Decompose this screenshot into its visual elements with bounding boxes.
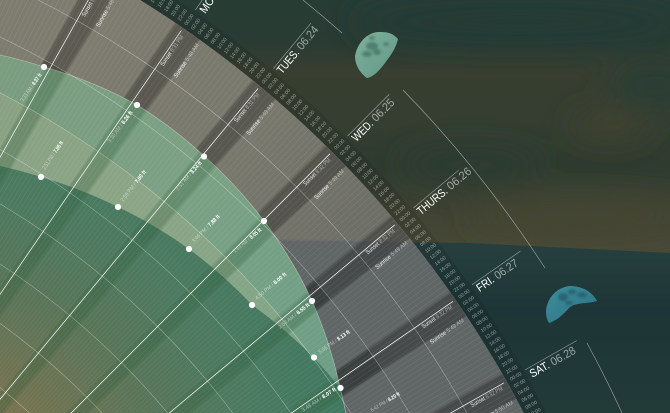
hours: Tuesday [258, 72, 343, 146]
hours: Thursday [396, 210, 470, 295]
hours: Wednesday [330, 138, 410, 218]
day divider lines and sunrise/sunset labels [0, 0, 516, 413]
translucent gray band: daylight ring [0, 0, 524, 413]
day line: Tuesday 06.24 [0, 88, 277, 413]
day line: Monday 06.23 [0, 30, 202, 413]
hours: Friday: 08:00 [475, 315, 489, 327]
hours: Wednesday: 00:00 [333, 138, 346, 151]
hours: Monday: 06:00 [203, 27, 216, 41]
hours: Friday: 20:00 [501, 357, 515, 369]
heading: WED 06.25: 06.25 [370, 97, 397, 124]
heading: TUES 06.24 [273, 23, 322, 77]
hours: Wednesday: 16:00 [378, 186, 391, 199]
hour labels around the rim [141, 0, 543, 413]
hours: Monday: 18:00 [242, 56, 255, 70]
outer arc connecting the moons [303, 0, 622, 413]
day line: Tuesday 06.24: Sunset 8:31 PM [234, 92, 261, 124]
tide label: 3:30 AM: 3:30 AM / 8.26 ft [107, 110, 135, 144]
tide label: 2:59 PM: 2:59 PM / 7.60 ft [120, 169, 148, 203]
day line: Sunday 06.22 [0, 0, 122, 413]
hours: Monday [181, 13, 270, 81]
tide label: 6:42 PM: 6:42 PM / 8.20 ft [370, 392, 401, 413]
heading: WED 06.25: WED. [350, 118, 376, 144]
hours: Friday: 04:00 [467, 302, 481, 314]
hours: Friday: 12:00 [484, 329, 498, 341]
hours: Tuesday: 00:00 [261, 72, 274, 85]
low tide dots [38, 174, 317, 361]
heading: FRI 06.27 [472, 251, 528, 296]
day line: Saturday 06.28: Sunset 8:32 PM [470, 386, 504, 409]
day line: Monday 06.23: Sunrise 5:48 AM [173, 43, 201, 79]
moon: upper moon over sky [355, 32, 398, 78]
hours: Monday: 22:00 [255, 67, 267, 80]
heading: THURS 06.26: THURS. [415, 185, 450, 218]
hours: Friday: 16:00 [493, 343, 507, 355]
heading: FRI 06.27: FRI. [474, 274, 497, 295]
hours: Thursday: 06:00 [414, 229, 428, 242]
hours: Wednesday: 12:00 [367, 174, 380, 187]
tide label: 2:53 AM: 2:53 AM / 8.55 ft [278, 302, 311, 331]
heading: THURS 06.26 [413, 164, 474, 218]
day line: Wednesday 06.25: Sunset 8:32 PM [303, 158, 332, 187]
hours: Friday [454, 288, 522, 377]
hours: Sunday: 20:00 [170, 4, 182, 18]
hours: Thursday: 22:00 [453, 282, 467, 294]
hours: Wednesday: 22:00 [394, 204, 407, 217]
hours: Monday: 00:00 [183, 13, 196, 27]
day line: Tuesday 06.24: Sunrise 5:49 AM [246, 102, 276, 137]
hours: Friday: 02:00 [462, 295, 476, 307]
photo background: sea below the horizon [270, 240, 670, 413]
hours: Thursday: 12:00 [429, 249, 443, 261]
hours: Tuesday: 14:00 [303, 109, 316, 123]
hours: Tuesday: 02:00 [267, 77, 280, 91]
hours: Wednesday: 14:00 [372, 180, 386, 193]
hours: Wednesday: 20:00 [388, 198, 402, 211]
day line: Thursday 06.26: Sunrise 5:49 AM [375, 241, 409, 271]
hours: Wednesday: 10:00 [361, 168, 375, 181]
tide label: 1:53 AM: 1:53 AM / 8.05 ft [232, 227, 263, 255]
high tide dots [41, 64, 344, 391]
hours: Saturday: 02:00 [513, 378, 527, 390]
day line: Thursday 06.26: Sunset 8:32 PM [365, 228, 397, 256]
hours: Sunday [141, 0, 190, 23]
day line: Friday 06.27 [0, 301, 467, 413]
heading: MON [196, 0, 240, 17]
day line: Wednesday 06.25 [0, 154, 348, 413]
tide edge outline [0, 55, 346, 413]
moon: lower moon over sea [546, 286, 597, 323]
hours: Tuesday: 12:00 [297, 104, 310, 117]
tide labels [20, 73, 401, 413]
hours: Tuesday: 18:00 [315, 121, 328, 134]
hours: Monday: 16:00 [236, 51, 248, 65]
heading: FRI 06.27: 06.27 [493, 257, 521, 282]
heading: SAT 06.28: 06.28 [549, 345, 578, 369]
hours: Thursday: 00:00 [399, 210, 412, 223]
night bands in gray ring [40, 0, 516, 413]
tide label: 2:51 AM: 2:51 AM / 8.24 ft [175, 160, 204, 192]
green tide area: high tide layer [0, 55, 342, 395]
hours: Saturday: 04:00 [517, 385, 531, 397]
hours: Thursday: 18:00 [443, 268, 457, 281]
tide label: 3:33 AM: 3:33 AM / 8.37 ft [20, 73, 44, 103]
hours: Monday: 12:00 [223, 41, 235, 55]
hours: Saturday [508, 371, 543, 413]
hours: Thursday: 02:00 [404, 217, 417, 229]
tide label: 4:50 PM: 4:50 PM / 8.00 ft [254, 272, 288, 302]
hours: Monday: 20:00 [248, 61, 261, 75]
day line: Saturday 06.28 [0, 383, 516, 413]
hours: Thursday: 04:00 [409, 223, 423, 236]
day line: Friday 06.27: Sunrise 5:49 AM [429, 318, 466, 346]
hours: Wednesday: 02:00 [339, 144, 352, 157]
day line: Thursday 06.26 [0, 225, 411, 413]
hours: Friday: 22:00 [505, 364, 519, 376]
hours: Friday: 06:00 [471, 308, 485, 321]
hours: Tuesday: 20:00 [321, 126, 334, 139]
hours: Sunday: 22:00 [177, 8, 189, 22]
hours: Saturday: 00:00 [509, 371, 523, 383]
day headings outside the rim [196, 0, 583, 381]
heading: TUES 06.24: 06.24 [295, 24, 322, 53]
hours: Wednesday: 04:00 [345, 150, 358, 163]
hours: Monday: 08:00 [210, 32, 222, 45]
hours: Monday: 04:00 [197, 22, 209, 36]
hours: Monday: 10:00 [216, 37, 229, 50]
hours: Thursday: 10:00 [424, 242, 438, 255]
hours: Wednesday: 18:00 [383, 192, 396, 205]
tide label: 5:46 PM: 5:46 PM / 8.13 ft [318, 329, 352, 356]
hours: Friday: 00:00 [457, 288, 471, 300]
day line: Wednesday 06.25: Sunrise 5:49 AM [314, 169, 346, 201]
hours: Thursday: 16:00 [439, 262, 452, 274]
hours: Friday: 14:00 [488, 336, 502, 348]
hours: Thursday: 20:00 [448, 275, 462, 287]
hours: Tuesday: 04:00 [273, 82, 286, 96]
hours: Friday: 18:00 [497, 350, 511, 362]
hours: Saturday: 08:00 [524, 400, 539, 411]
hours: Tuesday: 06:00 [279, 88, 292, 101]
hours: Wednesday: 08:00 [356, 162, 369, 175]
hours: Monday: 02:00 [190, 17, 202, 31]
hours: Wednesday: 06:00 [350, 156, 364, 169]
day line: Friday 06.27: Sunset 8:32 PM [421, 305, 454, 330]
heading: SAT 06.28 [525, 341, 583, 381]
tide label: 3:46 PM: 3:46 PM / 7.88 ft [191, 214, 222, 244]
heading: THURS 06.26: 06.26 [445, 166, 474, 193]
day line: Monday 06.23: Sunset 8:31 PM [160, 35, 185, 68]
green tide area: low tide layer [0, 166, 346, 413]
hours: Tuesday: 08:00 [285, 93, 298, 106]
hours: Thursday: 14:00 [434, 255, 448, 268]
hours: Saturday: 06:00 [521, 393, 535, 404]
tide label: 2:51 PM: 2:51 PM / 7.86 ft [42, 140, 65, 171]
heading: WED 06.25 [348, 94, 399, 146]
hours: Tuesday: 10:00 [291, 98, 304, 112]
hours: Thursday: 08:00 [419, 236, 433, 248]
hours: Tuesday: 22:00 [327, 132, 340, 145]
tide label: 3:48 AM: 3:48 AM / 8.07 ft [301, 387, 338, 413]
night bands in green area [0, 68, 342, 413]
hours: Tuesday: 16:00 [309, 115, 322, 128]
heading: TUES 06.24: TUES. [275, 47, 302, 76]
hours: Friday: 10:00 [480, 322, 494, 334]
heading: SAT 06.28: SAT. [528, 360, 552, 380]
hours: Monday: 14:00 [229, 46, 242, 60]
